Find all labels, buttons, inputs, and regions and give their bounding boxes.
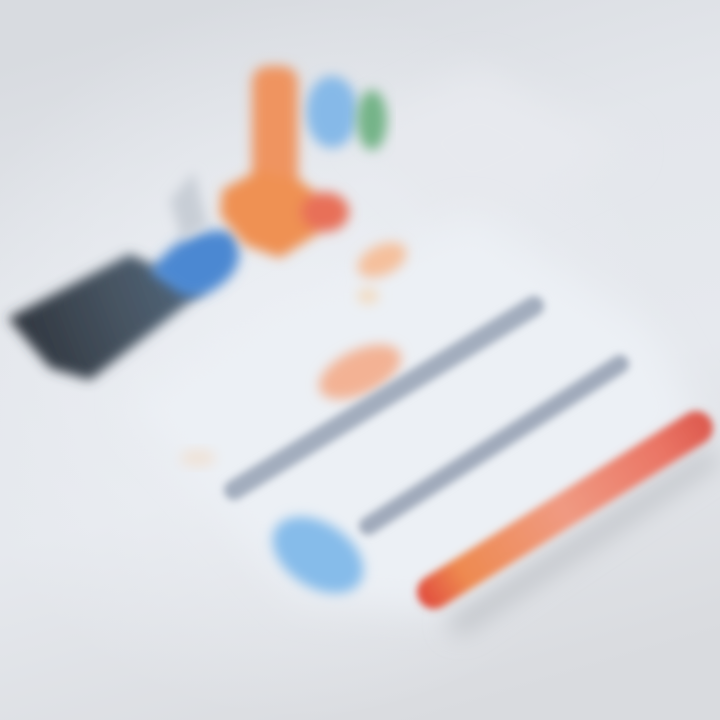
icon: phone xyxy=(8,254,205,380)
icon: small orange mark xyxy=(352,235,412,304)
document sheet xyxy=(130,215,700,610)
blue oval button xyxy=(259,501,377,609)
icon: orange arc mark xyxy=(311,333,409,411)
faint upper document sheet xyxy=(360,70,630,230)
icon: orange pointing hand xyxy=(220,66,349,258)
icon: grey sliver above blue xyxy=(170,172,208,240)
icon: blue semicircle xyxy=(150,230,239,296)
small faint mark xyxy=(180,449,216,467)
red bar shadow xyxy=(445,448,720,636)
red gradient bar xyxy=(434,428,696,592)
grey bar 1 xyxy=(234,306,534,490)
icon: blue tile xyxy=(306,76,358,148)
grey bar 2 xyxy=(368,364,620,526)
icon: green tile xyxy=(357,90,387,150)
